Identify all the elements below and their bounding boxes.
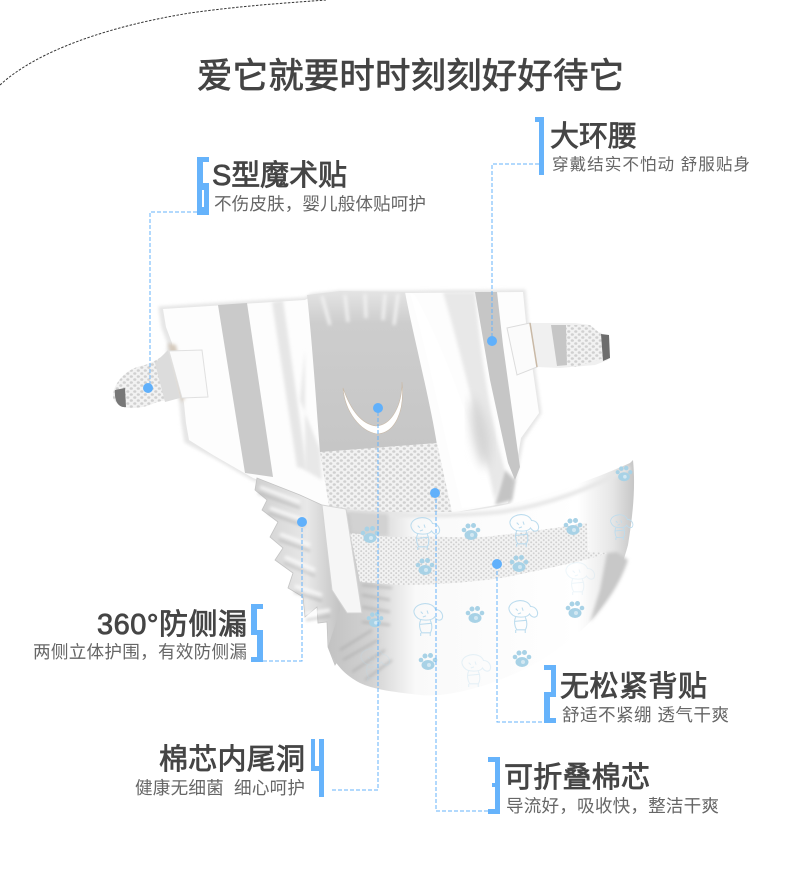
upper front fold shading bbox=[349, 512, 388, 536]
diaper illustration bbox=[113, 290, 634, 695]
bracket bbox=[251, 604, 263, 662]
gathered fan bbox=[340, 585, 392, 680]
crescent back opening bbox=[343, 382, 403, 434]
puppy prints bbox=[361, 515, 633, 687]
heading: 无松紧背贴 bbox=[560, 670, 707, 703]
heading: S型魔术贴 bbox=[212, 159, 347, 192]
bracket bbox=[544, 665, 556, 723]
inner fold lines bbox=[300, 350, 322, 480]
callout: 360 side leak guard bbox=[33, 517, 307, 662]
mesh waistband bbox=[350, 523, 607, 585]
heading: 可折叠棉芯 bbox=[504, 761, 650, 794]
decorative arc line bbox=[0, 0, 326, 85]
waist gathers bbox=[322, 294, 398, 325]
description: 舒适不紧绷 透气干爽 bbox=[562, 705, 729, 725]
callout: back patch bbox=[492, 559, 729, 725]
right grey stripe bbox=[475, 292, 520, 480]
left tab bbox=[113, 350, 208, 408]
centre grey panel bbox=[307, 291, 437, 453]
callout: S magic tape bbox=[143, 157, 426, 393]
front right fold shadow bbox=[590, 552, 628, 622]
anchor dot bbox=[492, 559, 502, 569]
side ruffles bbox=[255, 478, 350, 665]
title: 爱它就要时时刻刻好好待它 bbox=[197, 56, 624, 96]
left white stripe edge bbox=[272, 300, 307, 470]
bracket bbox=[488, 757, 500, 814]
callout: foldable core bbox=[430, 488, 719, 816]
anchor dot bbox=[373, 403, 383, 413]
leader line bbox=[497, 564, 542, 722]
leader line bbox=[150, 212, 197, 388]
leak guard strap bbox=[322, 505, 362, 613]
leader line bbox=[332, 408, 378, 790]
description: 健康无细菌 细心呵护 bbox=[135, 778, 305, 798]
description: 穿戴结实不怕动 舒服贴身 bbox=[552, 155, 750, 174]
diaper back body bbox=[159, 290, 541, 515]
anchor dot bbox=[487, 336, 497, 346]
anchor dot bbox=[430, 488, 440, 498]
leader line bbox=[263, 522, 302, 661]
paw prints bbox=[361, 466, 632, 670]
front body bbox=[322, 460, 634, 695]
bracket bbox=[535, 117, 544, 175]
front top edge shading bbox=[345, 468, 630, 516]
anchor dot bbox=[143, 383, 153, 393]
callout: big waistband bbox=[487, 117, 750, 346]
mesh core bbox=[320, 443, 452, 512]
heading: 棉芯内尾洞 bbox=[159, 743, 305, 776]
anchor dot bbox=[297, 517, 307, 527]
leader line bbox=[492, 164, 539, 341]
heading: 大环腰 bbox=[550, 120, 637, 153]
callout: tail hole bbox=[135, 403, 383, 798]
bracket bbox=[197, 157, 209, 215]
description: 导流好，吸收快，整洁干爽 bbox=[506, 796, 719, 816]
left grey stripe bbox=[218, 303, 273, 477]
right tab bbox=[507, 323, 610, 375]
heading: 360°防侧漏 bbox=[97, 608, 247, 641]
bracket bbox=[311, 739, 324, 797]
description: 不伤皮肤，婴儿般体贴呵护 bbox=[214, 194, 426, 214]
description: 两侧立体护围，有效防侧漏 bbox=[33, 642, 247, 662]
leader line bbox=[436, 493, 488, 811]
